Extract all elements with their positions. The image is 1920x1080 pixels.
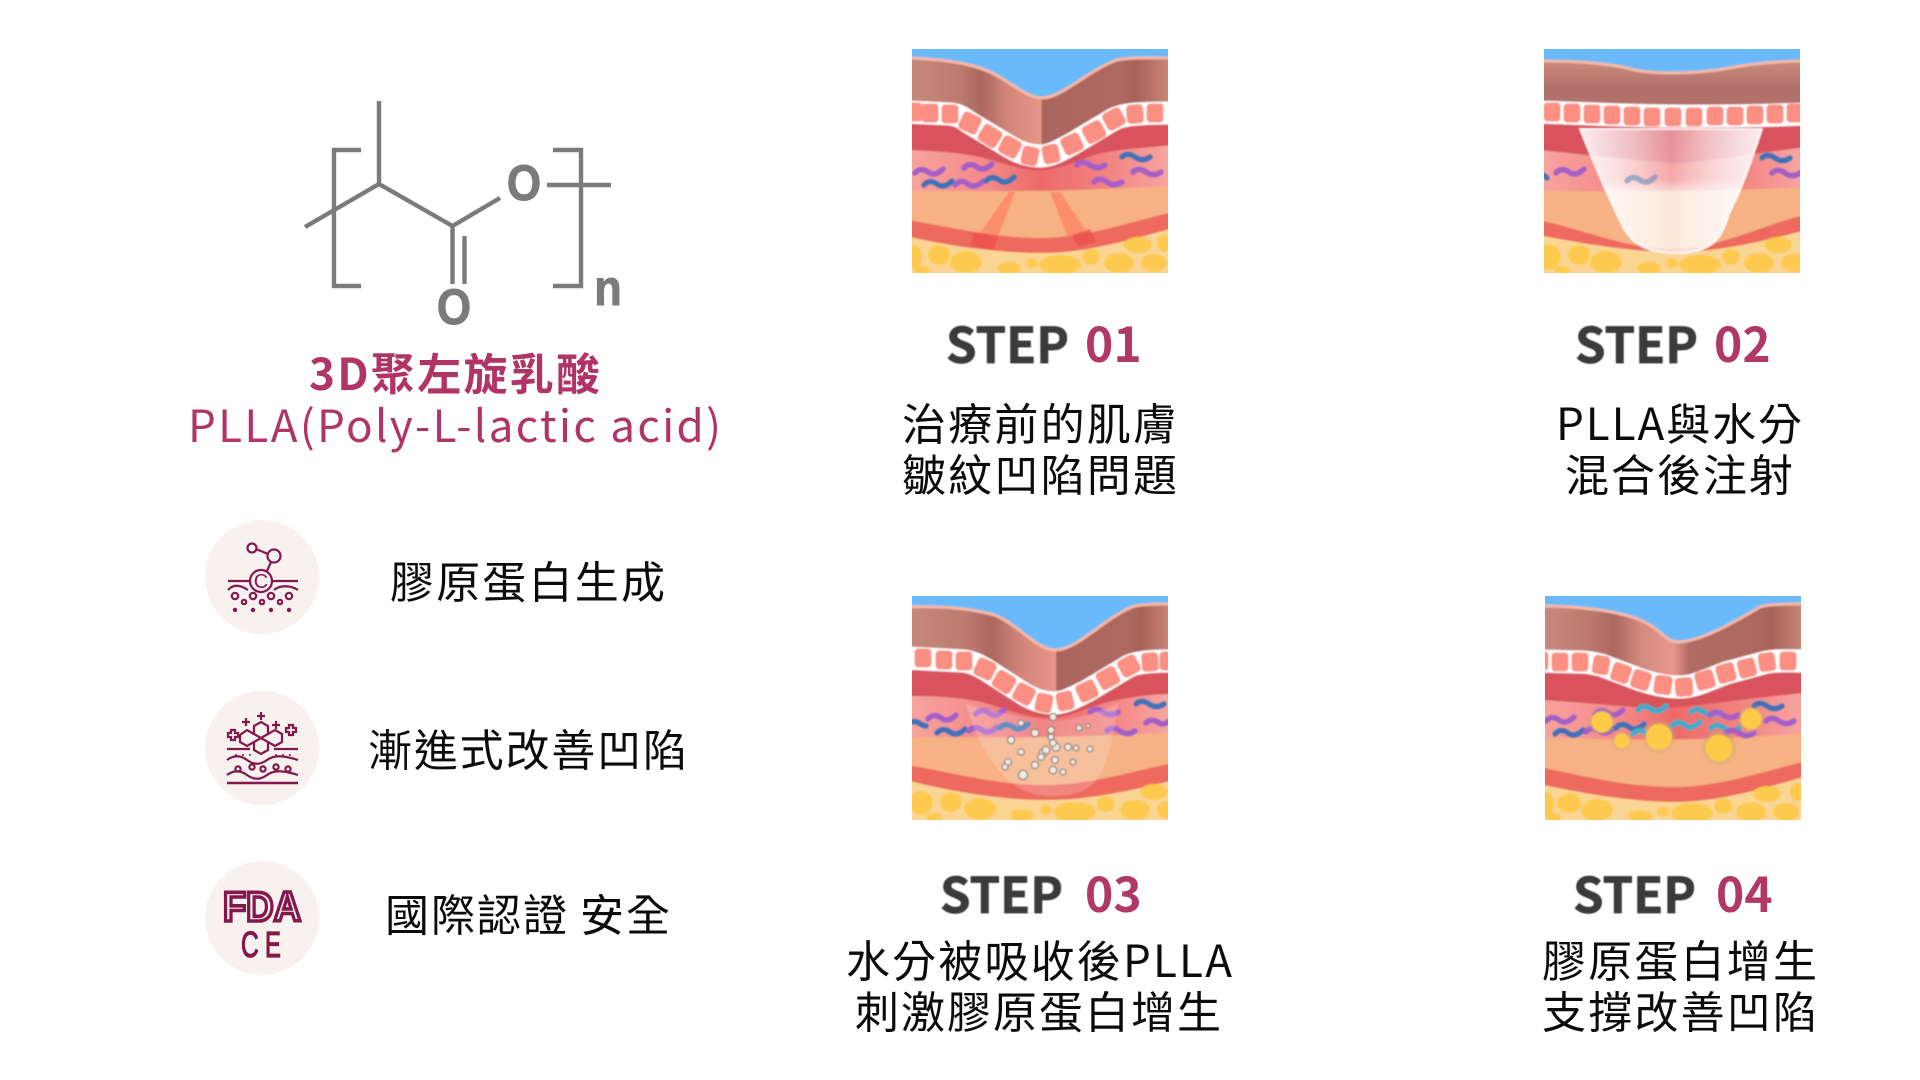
chemical structure of PLLA [305,101,622,335]
benefit 1 [205,520,665,634]
panel: step 01 [902,43,1177,504]
chemical structure of PLLA: O [507,154,541,211]
text: description line 2: 混合後注射 [1565,440,1793,504]
illustration: PLLA injected [1544,49,1800,273]
illustration: collagen growth supports depression [1545,596,1801,820]
text: description line 2: 支撐改善凹陷 [1542,977,1817,1041]
benefit 3 [205,861,672,975]
benefit 2 [205,691,687,805]
icon: FDA CE certification: C [241,924,259,965]
icon: FDA CE certification: FDA [223,883,301,930]
icon: FDA CE certification [205,861,319,975]
text: description line 2: 皺紋凹陷問題 [902,440,1177,504]
icon: collagen generation: C [254,571,268,593]
label: collagen generation: 膠原蛋白生成 [390,547,665,611]
label: international certification: 國際認證 [385,880,569,944]
icon: gradual improvement [205,691,319,805]
icon: collagen generation [205,520,319,634]
icon: FDA CE certification: E [265,925,281,965]
number: 02: 02 [1714,306,1771,376]
number: 01: 01 [1085,306,1142,376]
text: description line 1: 治療前的肌膚 [902,389,1177,453]
title: 3D PLLA chinese name: 3D聚左旋乳酸 [309,339,600,403]
chemical structure of PLLA: n [594,261,622,317]
text: description line 1: 水分被吸收後PLLA [846,926,1232,990]
label: international certification: 安全 [580,880,672,944]
heading: step 04: STEP [1573,857,1696,928]
text: description line 1: 膠原蛋白增生 [1542,926,1817,990]
subtitle: PLLA english name: PLLA(Poly-L-lactic acid) [188,391,721,455]
panel: step 04 [1532,590,1817,1041]
panel: step 02 [1533,43,1807,504]
illustration: water absorbed, PLLA particles stimulate [912,596,1168,820]
number: 04: 04 [1716,856,1773,926]
text: description line 2: 刺激膠原蛋白增生 [855,977,1221,1041]
heading: step 02: STEP [1575,307,1698,378]
heading: step 01: STEP [946,307,1069,378]
text: description line 1: PLLA與水分 [1556,389,1802,453]
heading: step 03: STEP [940,857,1063,928]
number: 03: 03 [1085,856,1142,926]
illustration: skin before treatment [906,43,1174,279]
panel: step 03 [846,590,1232,1041]
label: gradual improvement: 漸進式改善凹陷 [368,715,687,779]
chemical structure of PLLA: O [437,278,471,335]
